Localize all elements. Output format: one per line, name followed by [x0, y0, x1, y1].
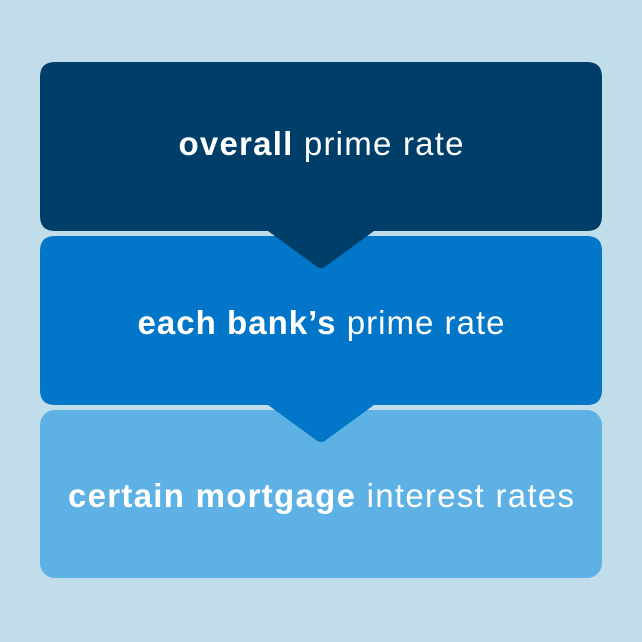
panel: certain mortgage interest rates [40, 410, 602, 578]
text: overall prime rate: overall prime rate [178, 125, 464, 162]
panel: overall prime rate [40, 62, 602, 268]
text: each bank's prime rate: each bank’s prime rate [138, 304, 504, 341]
text: certain mortgage interest rates: certain mortgage interest rates [68, 477, 574, 514]
panel: each bank's prime rate [40, 236, 602, 442]
